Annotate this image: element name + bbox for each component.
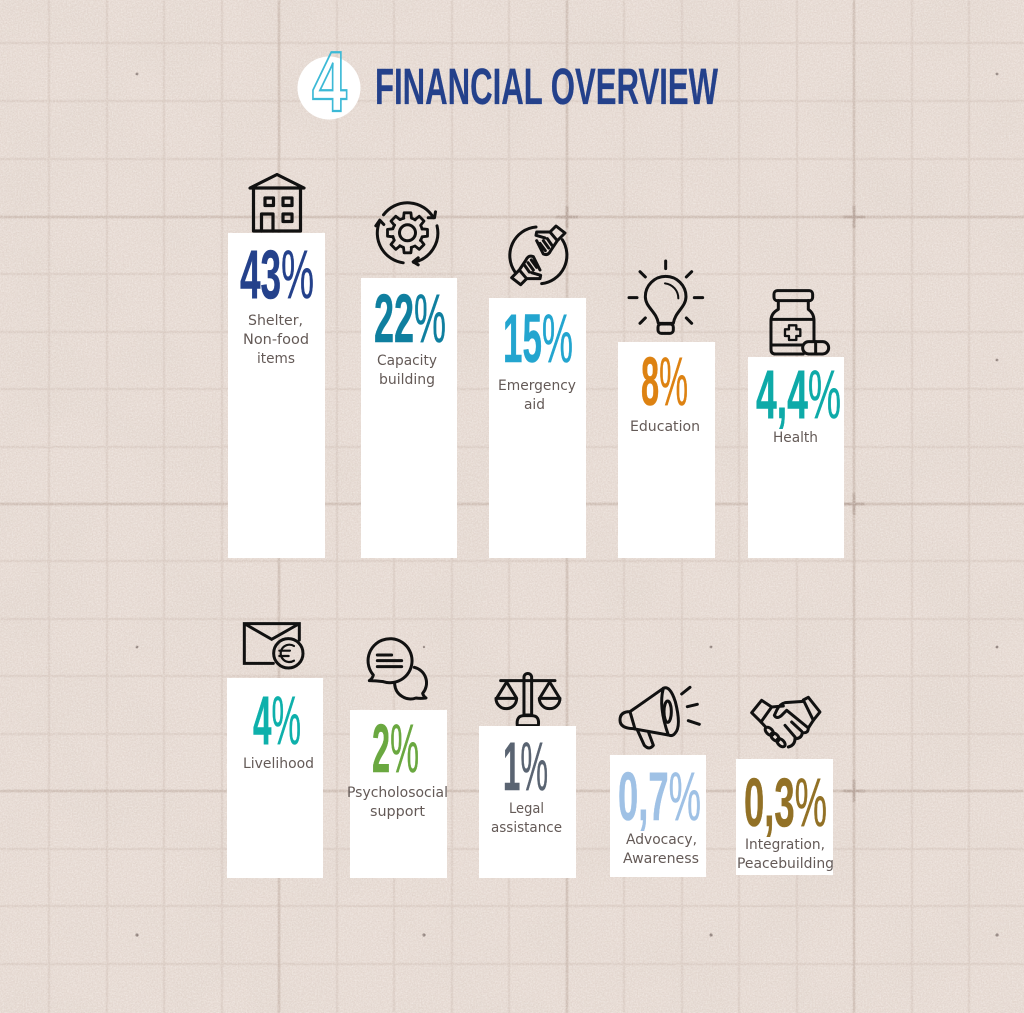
card (227, 678, 323, 878)
column: livelihood 4% (227, 624, 323, 878)
icon: light bulb (629, 261, 703, 333)
label: Health (773, 430, 818, 446)
label: Awareness (623, 851, 699, 867)
card (479, 726, 576, 878)
card (361, 278, 457, 558)
label (347, 785, 448, 820)
card (618, 342, 715, 558)
label: items (257, 351, 295, 367)
label: support (370, 804, 425, 820)
label: Psycholosocial (347, 785, 448, 801)
icon: scales of justice (496, 673, 560, 726)
icon: gear with circular arrows (376, 203, 438, 265)
label: Capacity (377, 353, 437, 369)
percentage: 15% (503, 300, 573, 377)
icon: handshake (752, 697, 820, 748)
label: building (379, 372, 435, 388)
percentage: 1% (503, 728, 548, 805)
icon: speech bubbles (368, 639, 427, 699)
column: legal assistance 1% (479, 673, 576, 878)
column: shelter, non-food items 43% (228, 174, 325, 558)
card (736, 759, 833, 875)
column: education 8% (618, 261, 715, 558)
label (377, 353, 437, 388)
percentage: 0,7% (618, 758, 701, 835)
column: health 4,4% (748, 291, 844, 558)
icon: envelope with euro coin (244, 624, 303, 668)
label: Integration, (745, 837, 825, 853)
icon: house (250, 174, 304, 231)
percentage: 4% (253, 682, 301, 759)
label (623, 832, 699, 867)
column: psychosocial support 2% (347, 639, 448, 878)
column: advocacy, awareness 0,7% (610, 687, 706, 877)
card (350, 710, 447, 878)
label: aid (524, 397, 545, 413)
card (610, 755, 706, 877)
percentage: 22% (374, 280, 446, 357)
label: Livelihood (243, 756, 314, 772)
percentage: 0,3% (744, 764, 827, 841)
label: Education (630, 419, 700, 435)
icon: medicine bottle and pill (771, 291, 829, 354)
percentage: 4,4% (756, 356, 841, 433)
card (748, 357, 844, 558)
heading: FINANCIAL OVERVIEW (375, 58, 719, 115)
column: emergency aid 15% (489, 226, 586, 558)
label (243, 313, 309, 367)
icon: megaphone (620, 687, 699, 748)
label: Non-food (243, 332, 309, 348)
label (491, 801, 562, 836)
column: capacity building 22% (361, 203, 457, 558)
section number badge: 4 (312, 35, 347, 130)
label: Emergency (498, 378, 576, 394)
card (228, 233, 325, 558)
percentage: 43% (240, 236, 314, 313)
card (489, 298, 586, 558)
percentage: 8% (641, 343, 688, 420)
label (498, 378, 576, 413)
column: integration, peacebuilding 0,3% (736, 697, 834, 875)
label: Legal (509, 801, 544, 817)
label: Advocacy, (626, 832, 697, 848)
label: assistance (491, 820, 562, 836)
icon: helping hands in circle (510, 226, 567, 285)
label: Peacebuilding (737, 856, 834, 872)
title block (298, 35, 719, 130)
percentage: 2% (372, 710, 419, 787)
label (737, 837, 834, 872)
label: Shelter, (248, 313, 303, 329)
